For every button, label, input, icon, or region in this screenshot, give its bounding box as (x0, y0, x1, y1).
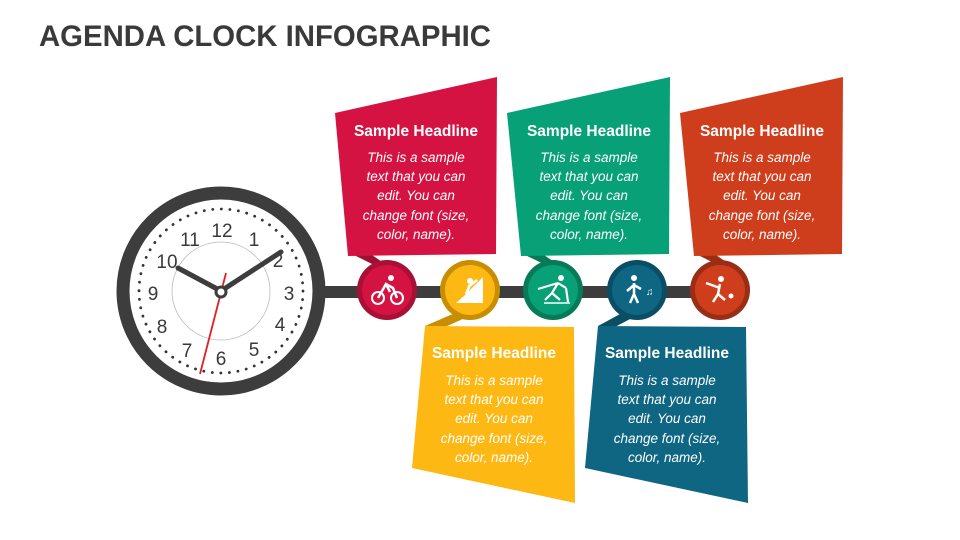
panel: yellow: edit. You can (455, 411, 533, 426)
clock (123, 193, 319, 389)
panel: yellow: text that you can (444, 392, 544, 407)
panel: green (507, 77, 670, 267)
clock: 2 (273, 251, 283, 272)
panel: orange: This is a sample (713, 150, 811, 165)
panel: red: This is a sample (367, 150, 465, 165)
clock: 5 (249, 340, 259, 361)
panel: red: text that you can (366, 169, 466, 184)
panel: green: text that you can (539, 169, 639, 184)
panel: orange: edit. You can (723, 188, 801, 203)
icon: dancing: ♫ (646, 287, 654, 298)
panel: yellow: This is a sample (445, 373, 543, 388)
panel: red: color, name). (377, 227, 455, 242)
panel: teal: text that you can (617, 392, 717, 407)
panel: yellow (412, 313, 575, 503)
panel: red (335, 77, 497, 267)
icon: cycling (357, 260, 417, 320)
panel: green: color, name). (550, 227, 628, 242)
panel: yellow: color, name). (455, 450, 533, 465)
clock: 11 (180, 230, 200, 251)
clock: 1 (249, 230, 259, 251)
clock: 4 (275, 315, 286, 336)
clock: 7 (182, 341, 192, 362)
panel: orange (680, 77, 843, 267)
icon: skiing (523, 260, 583, 320)
panel: teal (585, 313, 748, 503)
clock: 6 (216, 349, 226, 370)
panel: red: change font (size, (363, 208, 469, 223)
panel: green: This is a sample (540, 150, 638, 165)
panel: red: Sample Headline (354, 123, 478, 140)
timeline bar (300, 286, 720, 298)
panel: orange: color, name). (723, 227, 801, 242)
icon: dancing (607, 260, 667, 320)
panel: orange: text that you can (712, 169, 812, 184)
panel: teal: color, name). (628, 450, 706, 465)
clock: 8 (157, 317, 167, 338)
clock: 9 (148, 284, 158, 305)
panel: yellow: change font (size, (441, 431, 547, 446)
clock: 12 (211, 221, 233, 242)
panel: yellow: Sample Headline (432, 345, 556, 362)
panel: green: change font (size, (536, 208, 642, 223)
icon: climbing (440, 260, 500, 320)
panel: red: edit. You can (377, 188, 455, 203)
panel: teal: edit. You can (628, 411, 706, 426)
icon: cricket (690, 260, 750, 320)
panel: teal: change font (size, (614, 431, 720, 446)
panel: orange: change font (size, (709, 208, 815, 223)
clock: 3 (284, 284, 294, 305)
panel: green: Sample Headline (527, 123, 651, 140)
clock: 10 (156, 252, 178, 273)
title: AGENDA CLOCK INFOGRAPHIC (39, 20, 491, 53)
panel: green: edit. You can (550, 188, 628, 203)
panel: teal: This is a sample (618, 373, 716, 388)
panel: orange: Sample Headline (700, 123, 824, 140)
panel: teal: Sample Headline (605, 345, 729, 362)
